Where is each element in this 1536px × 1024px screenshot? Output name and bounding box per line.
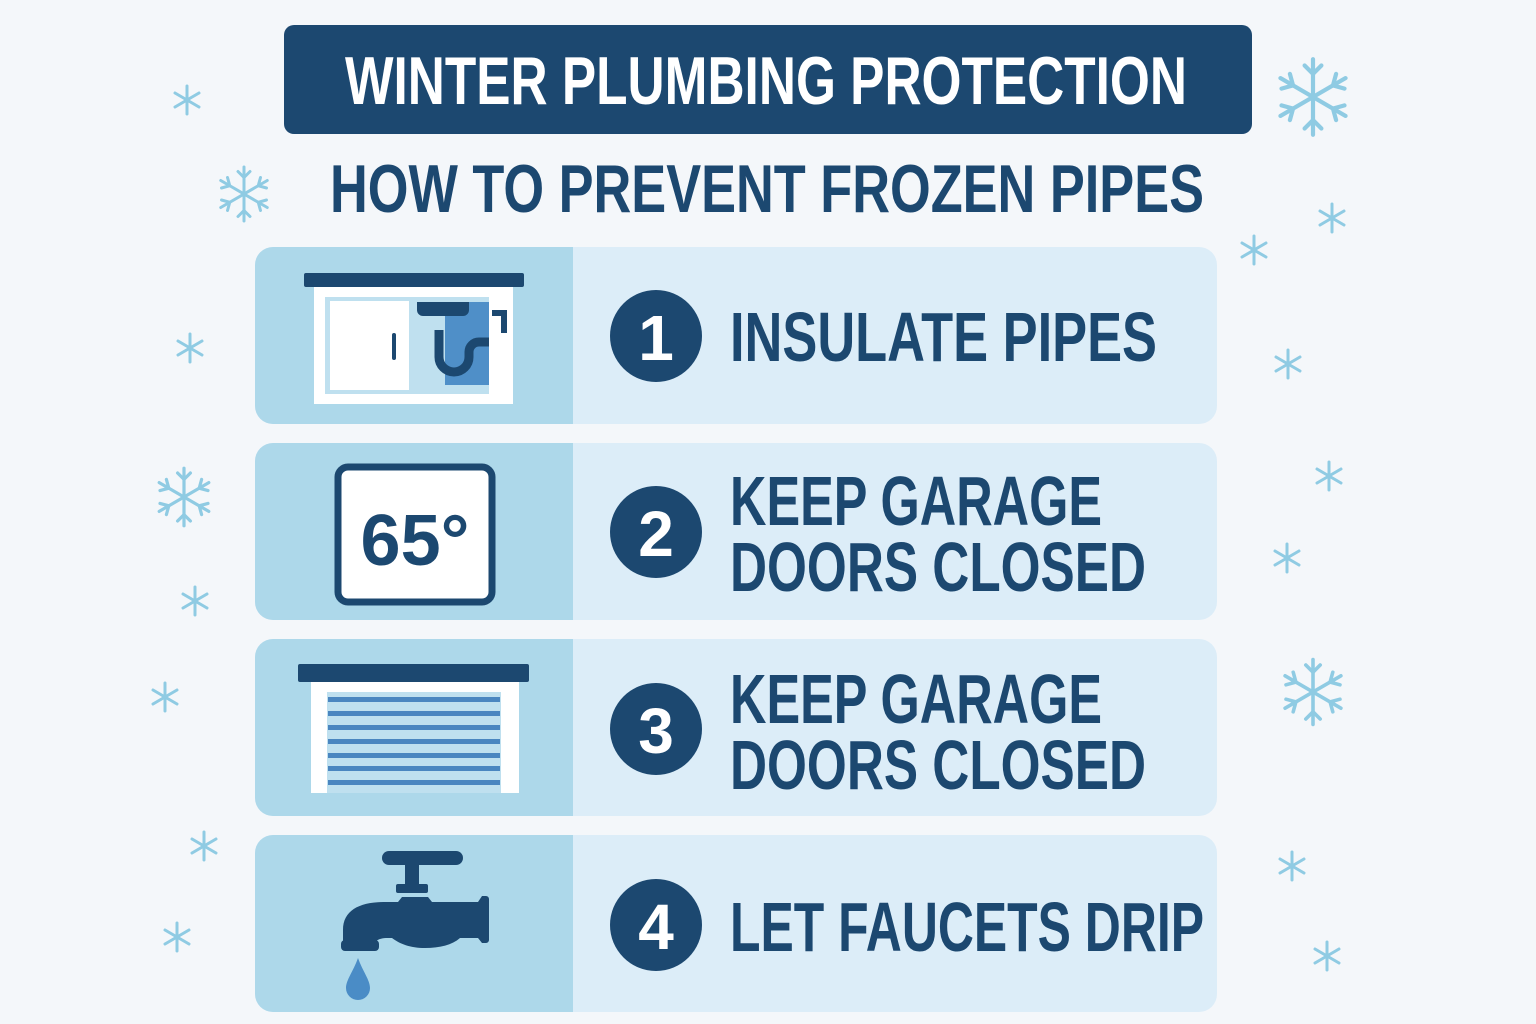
label 3: KEEP GARAGE <box>730 660 1102 738</box>
label 1: INSULATE PIPES <box>730 298 1157 376</box>
icon: thermostat 65°: 65° <box>361 501 469 581</box>
number badge 1: 1 <box>638 302 674 374</box>
number badge 1 <box>610 290 702 382</box>
label 2 <box>730 462 1146 606</box>
title banner: WINTER PLUMBING PROTECTION <box>345 43 1187 119</box>
icon: thermostat 65° <box>338 467 492 602</box>
icon: dripping faucet <box>341 851 489 1000</box>
number badge 4: 4 <box>638 891 674 963</box>
row 1: insulate pipes <box>255 247 1217 424</box>
number badge 2: 2 <box>638 498 674 570</box>
title banner <box>284 25 1252 134</box>
row 2 <box>255 443 1217 620</box>
label 3 <box>730 660 1146 804</box>
icon: sink cabinet <box>304 273 524 404</box>
number badge 3 <box>610 683 702 775</box>
number badge 2 <box>610 486 702 578</box>
row 3 <box>255 639 1217 816</box>
label 3: DOORS CLOSED <box>730 726 1146 804</box>
snowflakes <box>153 59 1346 970</box>
icon: garage door <box>298 664 529 793</box>
label 4: LET FAUCETS DRIP <box>730 888 1204 966</box>
row 4 <box>255 835 1217 1012</box>
label 2: DOORS CLOSED <box>730 528 1146 606</box>
number badge 3: 3 <box>638 695 674 767</box>
subtitle: HOW TO PREVENT FROZEN PIPES <box>330 151 1204 227</box>
number badge 4 <box>610 879 702 971</box>
label 2: KEEP GARAGE <box>730 462 1102 540</box>
